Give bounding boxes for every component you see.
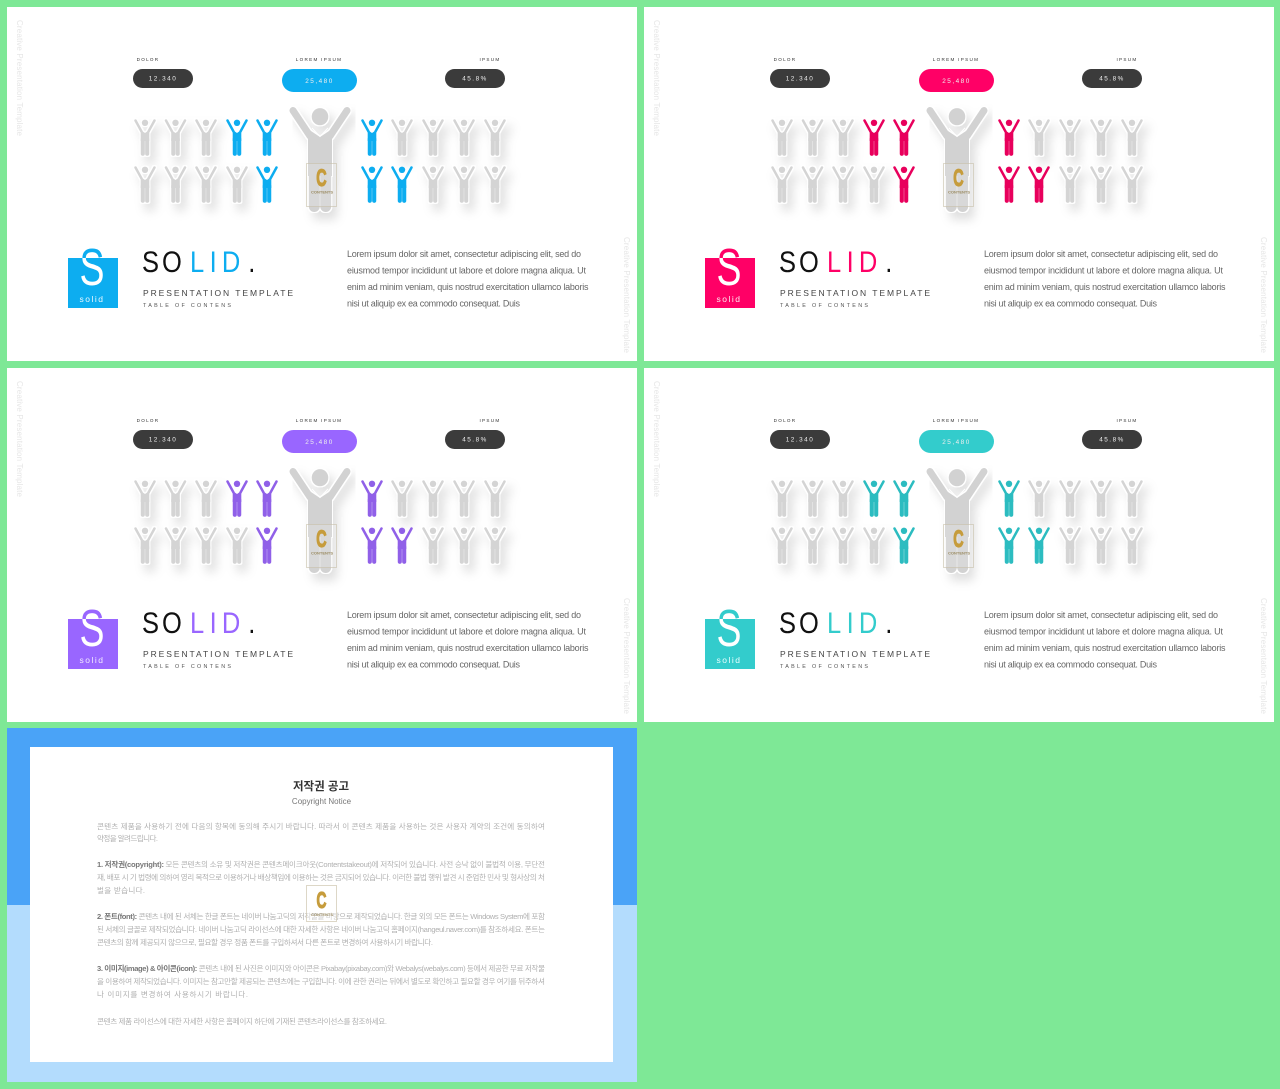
stat: lorem ipsum: LOREM IPSUM: [933, 418, 979, 423]
section 3: image and icon: [97, 963, 545, 999]
subtitle: [143, 649, 293, 670]
text block: eiusmod tempor incididunt ut labore et dolore magna aliqua. Ut: [984, 626, 1223, 636]
subtitle: PRESENTATION TEMPLATE: [143, 288, 293, 298]
watermark logo: CONTENTS: [948, 190, 970, 194]
stat: lorem ipsum: [282, 418, 357, 453]
intro paragraph: 콘텐츠 제품을 사용하기 전에 다음의 항목에 동의해 주시기 바랍니다. 따라서 이 콘텐츠 제품을 사용하는 것은 사용자 계약의 조건에 동의하여: [97, 821, 545, 831]
stat: ipsum: 45.8%: [1099, 76, 1125, 82]
intro paragraph: [97, 821, 545, 843]
subtitle: [780, 649, 930, 670]
subtitle: PRESENTATION TEMPLATE: [780, 649, 930, 659]
title: SO: [142, 245, 182, 278]
watermark logo: [948, 165, 970, 194]
title: SO: [142, 606, 182, 639]
section 3: image and icon: 3. 이미지(image) & 아이콘(icon): 콘텐츠 내에 된 사진은 이미지와 아이콘은 Pixabay(pixabay.com)와 Webalys(webalys.com) 등에서 제공한 무료 저작물: [97, 963, 545, 973]
section 2: font: [97, 911, 545, 947]
subtitle: TABLE OF CONTENS: [143, 664, 231, 670]
intro paragraph: 약정을 알려드립니다.: [97, 833, 158, 843]
text block: nisi ut aliquip ex ea commodo consequat. Duis: [347, 298, 520, 308]
icon: solid logo: S: [80, 238, 104, 296]
text block: enim ad minim veniam, quis nostrud exercitation ullamco laboris: [347, 643, 589, 653]
watermark logo: CONTENTS: [948, 550, 970, 556]
stat: ipsum: IPSUM: [1116, 57, 1138, 62]
stat: ipsum: 45.8%: [1099, 436, 1125, 444]
stat: lorem ipsum: 25,480: [305, 439, 334, 446]
text block: Lorem ipsum dolor sit amet, consectetur adipiscing elit, sed do: [347, 249, 581, 259]
panel: slide 3 purple: [7, 368, 637, 722]
watermark logo: [306, 886, 336, 922]
text block: nisi ut aliquip ex ea commodo consequat. Duis: [347, 660, 520, 670]
stat: lorem ipsum: LOREM IPSUM: [296, 57, 342, 62]
side label left: Creative Presentation Template: [15, 20, 24, 137]
heading: copyright notice: [292, 779, 352, 806]
subtitle: [780, 288, 930, 309]
title: LID: [190, 606, 240, 639]
subtitle: [143, 288, 293, 309]
stat: lorem ipsum: [919, 418, 994, 453]
panel: slide 1 blue: [7, 7, 637, 361]
stat: dolor: 12.340: [786, 436, 814, 444]
watermark logo: C: [316, 165, 327, 192]
side label right: Creative Presentation Template: [1259, 237, 1268, 354]
stat: ipsum: 45.8%: [462, 436, 488, 444]
watermark logo: [311, 526, 333, 556]
icon: solid logo: S: [717, 238, 741, 296]
icon: solid logo: S: [717, 599, 741, 657]
icon: solid logo: solid: [717, 294, 741, 304]
title: SO: [779, 245, 819, 278]
stat: ipsum: 45.8%: [462, 76, 488, 82]
title: .: [885, 245, 892, 278]
text block: eiusmod tempor incididunt ut labore et dolore magna aliqua. Ut: [347, 626, 586, 636]
text block: Lorem ipsum dolor sit amet, consectetur adipiscing elit, sed do: [984, 610, 1218, 620]
stat: lorem ipsum: [919, 57, 994, 92]
heading: copyright notice: 저작권 공고: [293, 779, 349, 793]
subtitle: PRESENTATION TEMPLATE: [780, 288, 930, 298]
section 2: font: 콘텐츠의 함께 제공되지 않으므로, 필요할 경우 정품 폰트를 구입하셔서 다른 폰트로 변경하여 사용하시기 바랍니다.: [97, 937, 433, 947]
text block: enim ad minim veniam, quis nostrud exercitation ullamco laboris: [984, 282, 1226, 292]
stat: dolor: [770, 57, 830, 88]
stat: dolor: [770, 418, 830, 449]
text block: [347, 610, 589, 670]
watermark logo: C: [953, 526, 964, 553]
stat: ipsum: IPSUM: [1116, 418, 1138, 423]
side label right: Creative Presentation Template: [1259, 598, 1268, 715]
watermark logo: C: [316, 526, 327, 553]
people pictogram: [772, 108, 1142, 206]
section 2: font: 2. 폰트(font): 콘텐츠 내에 된 서체는 한글 폰트는 네이버 나눔고딕의 저작물을 바탕으로 제작되었습니다. 한글 외의 모든 폰트는 Windows System에 포함: [97, 911, 545, 921]
subtitle: TABLE OF CONTENS: [780, 664, 868, 670]
stat: dolor: [133, 418, 193, 449]
watermark logo: C: [317, 889, 327, 914]
title: LID: [827, 245, 877, 278]
icon: solid logo: S: [80, 599, 104, 657]
stat: lorem ipsum: 25,480: [942, 78, 971, 85]
title: .: [248, 606, 255, 639]
stat: dolor: 12.340: [149, 436, 177, 444]
panel: slide 2 pink: [644, 7, 1274, 361]
subtitle: TABLE OF CONTENS: [780, 303, 868, 309]
subtitle: TABLE OF CONTENS: [143, 303, 231, 309]
section 1: copyright: 벌을 받습니다.: [97, 885, 145, 895]
side label left: Creative Presentation Template: [15, 381, 24, 498]
text block: Lorem ipsum dolor sit amet, consectetur adipiscing elit, sed do: [347, 610, 581, 620]
icon: solid logo: S: [80, 599, 104, 657]
stat: ipsum: [445, 418, 505, 449]
watermark logo: [948, 526, 970, 556]
text block: [984, 249, 1226, 308]
watermark logo: CONTENTS: [311, 190, 333, 194]
section 1: copyright: 1. 저작권(copyright): 모든 콘텐츠의 소유 및 저작권은 콘텐츠메이크아웃(Contentstakeout)에 저작되어 있습니다. 사전 승낙 없이 불법적 이용, 무단전: [97, 859, 545, 869]
stat: ipsum: IPSUM: [479, 418, 501, 423]
text block: Lorem ipsum dolor sit amet, consectetur adipiscing elit, sed do: [984, 249, 1218, 259]
stat: dolor: 12.340: [786, 76, 814, 82]
icon: solid logo: [705, 248, 755, 308]
stat: dolor: [133, 57, 193, 88]
text block: [984, 610, 1226, 670]
icon: solid logo: [68, 248, 118, 308]
stat: ipsum: [445, 57, 505, 88]
side label left: Creative Presentation Template: [652, 20, 661, 137]
section 1: copyright: 재, 배포 시 기 법령에 의하여 영리 목적으로 이용하거나 배상책임에 이용하는 것은 금지되어 있습니다. 이러한 불법 행위 발견 시 준엄한 민사 및 형사상의 처: [97, 872, 545, 882]
stat: dolor: DOLOR: [137, 57, 159, 62]
subtitle: PRESENTATION TEMPLATE: [143, 649, 293, 659]
people pictogram: [136, 469, 504, 568]
icon: solid logo: [68, 610, 118, 669]
stat: dolor: DOLOR: [774, 418, 796, 423]
stat: lorem ipsum: LOREM IPSUM: [296, 418, 342, 423]
watermark logo: CONTENTS: [311, 912, 333, 917]
icon: solid logo: solid: [717, 655, 741, 665]
title: LID: [827, 606, 877, 639]
section 3: image and icon: 을 이용하여 제작되었습니다. 이미지는 참고만할 제공되는 콘텐츠에는 구입합니다. 이에 관한 권리는 뒤에서 별도로 확인하고 필요할 경우 여기를 뒤주하셔: [97, 976, 545, 986]
title: .: [885, 606, 892, 639]
stat: ipsum: [1082, 57, 1142, 88]
icon: solid logo: solid: [80, 655, 104, 665]
section 1: copyright: [97, 859, 545, 895]
heading: copyright notice: Copyright Notice: [292, 797, 352, 806]
closing line: 콘텐츠 제품 라이선스에 대한 자세한 사항은 홈페이지 하단에 기재된 콘텐츠라이선스를 참조하세요.: [97, 1016, 387, 1026]
people pictogram: [136, 108, 504, 206]
title: .: [248, 245, 255, 278]
text block: enim ad minim veniam, quis nostrud exercitation ullamco laboris: [984, 643, 1226, 653]
stat: lorem ipsum: [282, 57, 357, 92]
text block: eiusmod tempor incididunt ut labore et dolore magna aliqua. Ut: [984, 266, 1223, 276]
text block: eiusmod tempor incididunt ut labore et dolore magna aliqua. Ut: [347, 266, 586, 276]
section 3: image and icon: 나 이미지를 변경하여 사용하시기 바랍니다.: [97, 989, 248, 999]
stat: dolor: DOLOR: [774, 57, 796, 62]
people pictogram: [772, 469, 1142, 568]
text block: [347, 249, 589, 308]
stat: ipsum: [1082, 418, 1142, 449]
text block: enim ad minim veniam, quis nostrud exercitation ullamco laboris: [347, 282, 589, 292]
stat: lorem ipsum: 25,480: [305, 78, 334, 85]
stat: lorem ipsum: LOREM IPSUM: [933, 57, 979, 62]
icon: solid logo: S: [717, 238, 741, 296]
watermark logo: C: [953, 165, 964, 192]
panel: slide 4 teal: [644, 368, 1274, 722]
stat: ipsum: IPSUM: [479, 57, 501, 62]
icon: solid logo: [705, 610, 755, 669]
title: SO: [779, 606, 819, 639]
stat: lorem ipsum: 25,480: [942, 439, 971, 446]
watermark logo: [311, 165, 333, 194]
icon: solid logo: solid: [80, 294, 104, 304]
title: LID: [190, 245, 240, 278]
text block: nisi ut aliquip ex ea commodo consequat. Duis: [984, 298, 1158, 308]
stat: dolor: 12.340: [149, 76, 177, 82]
section 2: font: 된 서체의 글꼴로 제작되었습니다. 네이버 나눔고딕 라이선스에 대한 자세한 사항은 네이버 나눔고딕 홈페이지(hangeul.naver.com)를 참조하세요. 폰트는: [97, 924, 545, 934]
side label right: Creative Presentation Template: [622, 237, 631, 354]
side label right: Creative Presentation Template: [622, 598, 631, 715]
text block: nisi ut aliquip ex ea commodo consequat. Duis: [984, 660, 1158, 670]
icon: solid logo: S: [80, 238, 104, 296]
watermark logo: CONTENTS: [311, 550, 333, 556]
icon: solid logo: S: [717, 599, 741, 657]
stat: dolor: DOLOR: [137, 418, 159, 423]
panel: copyright notice slide: [7, 728, 637, 1082]
side label left: Creative Presentation Template: [652, 381, 661, 498]
